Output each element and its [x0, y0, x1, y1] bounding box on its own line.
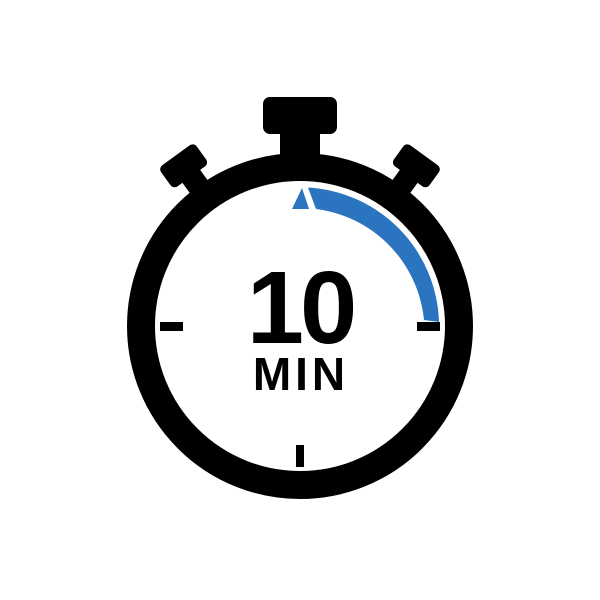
MIN label: MIN	[253, 348, 349, 400]
watch ring	[141, 167, 459, 485]
right side button	[374, 142, 442, 213]
blue progress arc	[292, 188, 439, 322]
number 10: 10	[247, 250, 354, 365]
left side button	[158, 142, 226, 213]
top button	[263, 97, 337, 162]
tick marks	[160, 322, 440, 467]
